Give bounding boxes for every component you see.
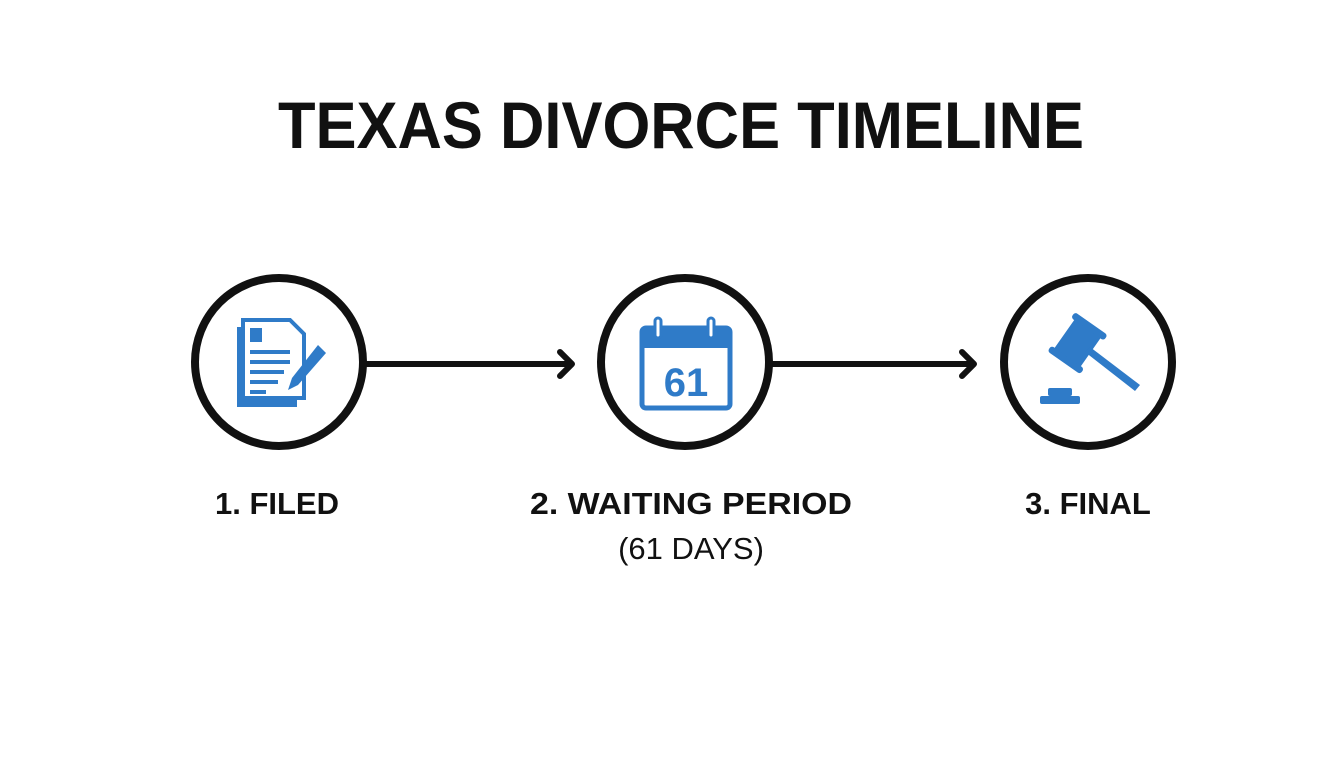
arrow: waiting to final bbox=[772, 352, 974, 376]
label 2: (61 DAYS) bbox=[618, 531, 764, 566]
title: TEXAS DIVORCE TIMELINE bbox=[278, 88, 1084, 162]
step 1: filed bbox=[195, 278, 363, 446]
label 1: 1. FILED bbox=[215, 486, 339, 521]
label 2 bbox=[530, 486, 852, 566]
icon: calendar 61: 61 bbox=[664, 361, 708, 405]
arrow: filed to waiting bbox=[367, 352, 572, 376]
step 2: waiting period bbox=[601, 278, 769, 446]
icon: calendar 61 bbox=[642, 318, 730, 408]
label 2: 2. WAITING PERIOD bbox=[530, 486, 852, 521]
icon: gavel bbox=[1040, 312, 1140, 404]
step 3: final bbox=[1004, 278, 1172, 446]
label 3: 3. FINAL bbox=[1025, 486, 1151, 521]
icon: document with pen bbox=[237, 320, 326, 407]
